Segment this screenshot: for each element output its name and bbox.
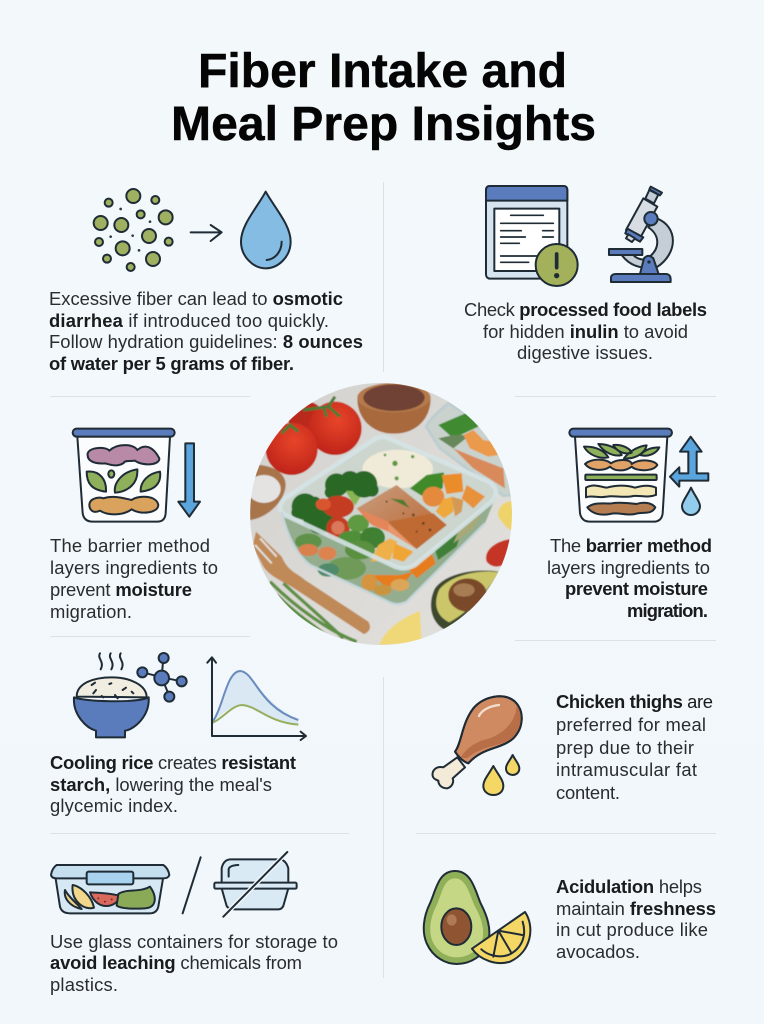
text: barrier method right bbox=[547, 535, 712, 621]
text: barrier method left: layers ingredients to bbox=[50, 557, 218, 578]
text: osmotic diarrhea and hydration bbox=[49, 288, 363, 374]
text: barrier method left: prevent moisture bbox=[50, 579, 192, 600]
text: acidulation bbox=[556, 876, 716, 962]
flax bowl bbox=[357, 383, 431, 434]
text: processed food labels bbox=[464, 299, 707, 363]
text: glass containers bbox=[50, 931, 338, 995]
broccoli bbox=[291, 471, 379, 534]
salt bowl bbox=[247, 465, 286, 520]
central photo: glass meal prep container bbox=[250, 383, 512, 645]
text: chicken thighs: content. bbox=[556, 782, 620, 803]
text: osmotic diarrhea and hydration: Follow hydration guidelines: 8 ounces bbox=[49, 331, 363, 352]
text: chicken thighs: preferred for meal bbox=[556, 714, 706, 735]
icon: avocado and lemon wedge bbox=[424, 871, 530, 964]
text: cooling rice bbox=[50, 752, 296, 816]
icon: chicken thigh with fat drops bbox=[433, 696, 522, 795]
text: processed food labels: for hidden inulin to avoid bbox=[483, 321, 688, 342]
text: barrier method left bbox=[50, 535, 218, 622]
title: Meal Prep Insights bbox=[171, 97, 596, 151]
text: chicken thighs: intramuscular fat bbox=[556, 759, 697, 780]
title bbox=[171, 44, 596, 151]
icon: layered container with moisture arrows bbox=[569, 429, 708, 522]
text: chicken thighs: prep due to their bbox=[556, 737, 694, 758]
text: glass containers: Use glass containers for storage to bbox=[50, 931, 338, 952]
text: barrier method right: prevent moisture bbox=[565, 578, 708, 599]
green beans bbox=[270, 582, 357, 642]
text: acidulation: in cut produce like bbox=[556, 919, 708, 940]
rice bbox=[362, 450, 433, 488]
text: glass containers: avoid leaching chemicals from bbox=[50, 952, 302, 973]
fork bbox=[253, 532, 370, 634]
icon: glass container versus plastic container bbox=[51, 852, 297, 917]
text: osmotic diarrhea and hydration: of water per 5 grams of fiber. bbox=[49, 353, 294, 374]
icon: fiber particles turning to water drop bbox=[94, 189, 291, 271]
salmon bbox=[357, 485, 447, 549]
main container bbox=[280, 437, 497, 604]
text: acidulation: maintain freshness bbox=[556, 898, 716, 919]
text: barrier method left: The barrier method bbox=[50, 535, 210, 556]
text: barrier method right: migration. bbox=[627, 600, 708, 621]
greens bbox=[338, 472, 444, 559]
text: cooling rice: starch, lowering the meal's bbox=[50, 774, 272, 795]
text: acidulation: avocados. bbox=[556, 941, 640, 962]
text: processed food labels: digestive issues. bbox=[517, 342, 653, 363]
sweet potatoes bbox=[371, 473, 485, 562]
text: acidulation: Acidulation helps bbox=[556, 876, 702, 897]
text: cooling rice: Cooling rice creates resistant bbox=[50, 752, 296, 773]
text: barrier method right: layers ingredients to bbox=[547, 557, 710, 578]
text: chicken thighs bbox=[556, 691, 713, 803]
text: osmotic diarrhea and hydration: diarrhea if introduced too quickly. bbox=[49, 310, 329, 331]
tomatoes bbox=[266, 397, 362, 475]
text: processed food labels: Check processed food labels bbox=[464, 299, 707, 320]
text: barrier method right: The barrier method bbox=[550, 535, 712, 556]
tomato slices bbox=[316, 496, 354, 540]
icon: layered container with downward arrow bbox=[73, 429, 200, 522]
icon: rice bowl, molecule and glycemic chart bbox=[74, 653, 306, 740]
text: chicken thighs: Chicken thighs are bbox=[556, 691, 713, 712]
text: glass containers: plastics. bbox=[50, 974, 118, 995]
second container bbox=[426, 403, 517, 496]
avocado bbox=[431, 570, 498, 630]
text: osmotic diarrhea and hydration: Excessive fiber can lead to osmotic bbox=[49, 288, 343, 309]
text: barrier method left: migration. bbox=[50, 601, 132, 622]
lemons and tomato slice bbox=[379, 501, 517, 645]
text: cooling rice: glycemic index. bbox=[50, 795, 178, 816]
title: Fiber Intake and bbox=[198, 44, 567, 98]
icon: food label and microscope bbox=[486, 186, 673, 286]
